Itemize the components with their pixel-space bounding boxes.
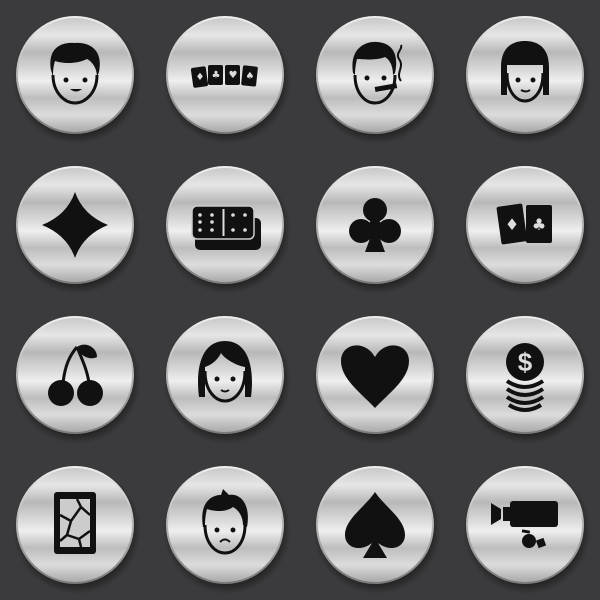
button: club [313, 166, 441, 294]
button: woman face [163, 316, 291, 444]
button: two cards: ♦ [505, 215, 519, 234]
button: heart [313, 316, 441, 444]
button: coins [463, 316, 591, 444]
button: sad boy [163, 466, 291, 594]
button: two cards: ♣ [532, 215, 546, 234]
button: girl face [463, 16, 591, 144]
button: diamond [13, 166, 141, 294]
button: domino [163, 166, 291, 294]
button: security camera [463, 466, 591, 594]
button: playing cards fan [163, 16, 291, 144]
button: playing cards fan: ♦ [196, 72, 204, 83]
button: spade [313, 466, 441, 594]
button: boy face [13, 16, 141, 144]
button: smoking man [313, 16, 441, 144]
button: playing cards fan: ♠ [246, 71, 254, 82]
button: playing cards fan: ♣ [212, 70, 220, 81]
button: coins: $ [518, 347, 533, 377]
button: broken card [13, 466, 141, 594]
button: cherries [13, 316, 141, 444]
button: two cards [463, 166, 591, 294]
button: playing cards fan: ♥ [229, 70, 238, 81]
